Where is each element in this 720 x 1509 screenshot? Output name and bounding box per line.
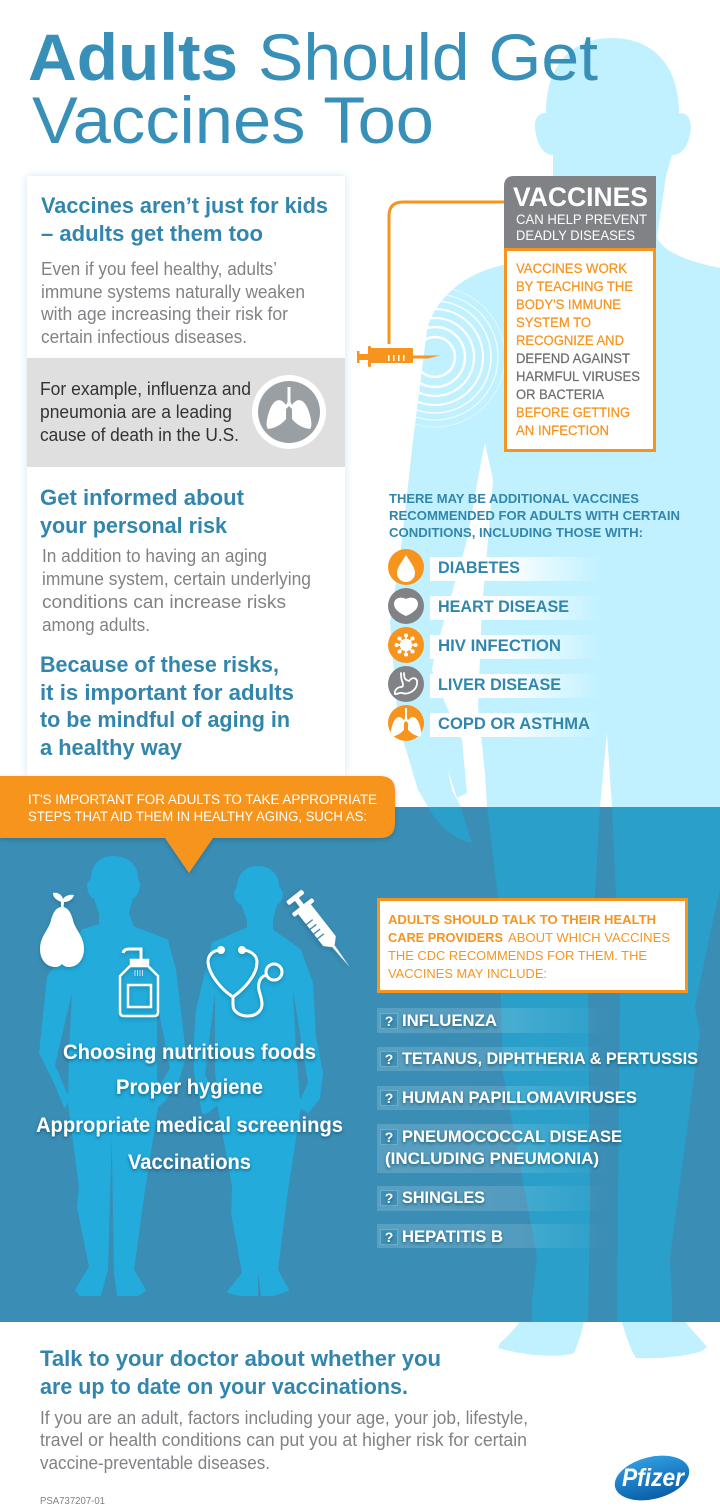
list item: tetanus: ? xyxy=(385,1051,393,1067)
text: healthy aging steps: Proper hygiene xyxy=(116,1076,263,1099)
connector line: syringe to vaccines box xyxy=(389,202,505,344)
grey band: influenza and pneumonia xyxy=(27,358,345,467)
list item: hepatitis b: ? xyxy=(385,1229,393,1245)
icon: stethoscope xyxy=(208,948,282,1016)
body silhouette inside dark section xyxy=(428,807,720,1322)
heading: talk to your doctor: are up to date on your vaccinations. xyxy=(40,1374,408,1399)
panel: how vaccines work: RECOGNIZE AND xyxy=(516,333,624,348)
heading: vaccines not just for kids: Vaccines aren’t just for kids xyxy=(41,193,328,218)
panel: intro card xyxy=(27,176,345,776)
text: underlying conditions: conditions can increase risks xyxy=(42,592,286,612)
panel: talk to providers: VACCINES MAY INCLUDE: xyxy=(388,966,547,981)
heading: because of these risks: it is important for adults xyxy=(40,680,294,705)
list item: hiv infection xyxy=(388,627,600,663)
text: additional vaccines: RECOMMENDED FOR ADULTS WITH CERTAIN xyxy=(389,508,680,523)
text: additional vaccines: THERE MAY BE ADDITIONAL VACCINES xyxy=(389,491,639,506)
panel: dark blue section xyxy=(0,807,720,1322)
figure: right person silhouette xyxy=(195,867,322,1295)
text: underlying conditions: In addition to having an aging xyxy=(42,546,267,566)
title xyxy=(28,20,598,157)
figure: left person silhouette xyxy=(40,857,185,1295)
text: risk factors: If you are an adult, factors including your age, your job, lifestyle, xyxy=(40,1408,528,1428)
heading: vaccines not just for kids xyxy=(41,193,328,246)
text: code: PSA737207-01 xyxy=(40,1496,105,1507)
icon: pear xyxy=(40,893,84,967)
title: Should Get xyxy=(258,20,598,94)
panel: vaccines header: CAN HELP PREVENT xyxy=(516,212,647,227)
panel: vaccines header: DEADLY DISEASES xyxy=(516,228,635,243)
panel: how vaccines work: AN INFECTION xyxy=(516,423,609,438)
panel: how vaccines work: OR BACTERIA xyxy=(516,387,604,402)
callout: orange banner: STEPS THAT AID THEM IN HEALTHY AGING, SUCH AS: xyxy=(28,809,367,824)
list item: pneumococcal disease: (INCLUDING PNEUMONIA) xyxy=(385,1149,599,1168)
list item: copd or asthma xyxy=(388,705,600,741)
list item: pneumococcal disease xyxy=(377,1124,622,1173)
text: risk factors: travel or health conditions can put you at higher risk for certain xyxy=(40,1430,527,1450)
heading: vaccines not just for kids: – adults get them too xyxy=(41,221,263,246)
text: immune systems weaken: immune systems naturally weaken xyxy=(41,282,305,302)
text: risk factors: vaccine-preventable diseases. xyxy=(40,1453,270,1473)
text: healthy aging steps: Vaccinations xyxy=(128,1151,251,1174)
heading: because of these risks: to be mindful of aging in xyxy=(40,707,290,732)
icon: orange syringe xyxy=(357,346,440,367)
list item: shingles: SHINGLES xyxy=(402,1188,485,1207)
heading: because of these risks xyxy=(40,652,294,760)
text: immune systems weaken: certain infectious diseases. xyxy=(41,327,247,347)
list item: hiv infection: HIV INFECTION xyxy=(438,636,561,655)
panel: vaccines header: VACCINES xyxy=(513,182,648,212)
list item: pneumococcal disease: PNEUMOCOCCAL DISEASE xyxy=(402,1127,622,1146)
text: underlying conditions: among adults. xyxy=(42,615,150,635)
list item: diabetes: DIABETES xyxy=(438,558,520,577)
icon: lungs in circle xyxy=(252,375,326,449)
panel: how vaccines work: BY TEACHING THE xyxy=(516,279,633,294)
heading: because of these risks: Because of these risks, xyxy=(40,652,279,677)
logo: pfizer xyxy=(610,1448,694,1508)
panel: talk to providers xyxy=(378,900,686,992)
heading: get informed: your personal risk xyxy=(40,513,228,538)
text: additional vaccines xyxy=(389,491,680,540)
text: additional vaccines: CONDITIONS, INCLUDING THOSE WITH: xyxy=(389,525,643,540)
callout: orange banner: IT'S IMPORTANT FOR ADULTS TO TAKE APPROPRIATE xyxy=(28,792,377,807)
text: healthy aging steps: Appropriate medical screenings xyxy=(36,1114,343,1137)
panel: vaccines header xyxy=(504,176,656,248)
text: healthy aging steps xyxy=(36,1041,343,1174)
list item: pneumococcal disease: ? xyxy=(385,1129,393,1145)
text: healthy aging steps: Choosing nutritious foods xyxy=(63,1041,316,1064)
list item: human papillomaviruses: ? xyxy=(385,1090,393,1106)
heading: talk to your doctor xyxy=(40,1346,441,1399)
list item: diabetes xyxy=(388,549,600,585)
grey band: influenza and pneumonia: pneumonia are a leading xyxy=(40,402,232,422)
panel: how vaccines work: HARMFUL VIRUSES xyxy=(516,369,640,384)
heading: get informed: Get informed about xyxy=(40,485,245,510)
panel: talk to providers: ADULTS SHOULD TALK TO THEIR HEALTH xyxy=(388,912,656,927)
panel: how vaccines work: SYSTEM TO xyxy=(516,315,591,330)
title: Vaccines Too xyxy=(32,83,434,157)
list item: copd or asthma: COPD OR ASTHMA xyxy=(438,714,590,733)
list item: shingles: ? xyxy=(385,1190,393,1206)
list item: liver disease: LIVER DISEASE xyxy=(438,675,561,694)
list item: influenza: INFLUENZA xyxy=(402,1011,497,1030)
arm gaps of the small figures xyxy=(55,990,308,1100)
heading: get informed xyxy=(40,485,245,538)
panel: talk to providers: CARE PROVIDERS xyxy=(388,930,503,945)
list item: influenza xyxy=(377,1008,610,1033)
panel: how vaccines work: DEFEND AGAINST xyxy=(516,351,630,366)
list item: liver disease xyxy=(388,666,600,702)
background: large body silhouette xyxy=(390,38,720,1358)
list item: hepatitis b: HEPATITIS B xyxy=(402,1227,503,1246)
panel: talk to providers: THE CDC RECOMMENDS FOR THEM. THE xyxy=(388,948,647,963)
list item: shingles xyxy=(377,1186,610,1211)
grey band: influenza and pneumonia: cause of death in the U.S. xyxy=(40,425,239,445)
panel: how vaccines work: BEFORE GETTING xyxy=(516,405,630,420)
list item: influenza: ? xyxy=(385,1013,393,1029)
icon: white syringe xyxy=(284,887,360,975)
list item: heart disease: HEART DISEASE xyxy=(438,597,569,616)
text: immune systems weaken: Even if you feel healthy, adults’ xyxy=(41,259,277,279)
list item: tetanus: TETANUS, DIPHTHERIA & PERTUSSIS xyxy=(402,1049,698,1068)
text: immune systems weaken: with age increasing their risk for xyxy=(40,304,288,324)
list item: heart disease xyxy=(388,588,600,624)
panel: talk to providers: ABOUT WHICH VACCINES xyxy=(508,930,670,945)
list item: hepatitis b xyxy=(377,1224,610,1248)
grey band: influenza and pneumonia: For example, influenza and xyxy=(40,379,251,399)
heading: because of these risks: a healthy way xyxy=(40,735,183,760)
logo: pfizer: Pfizer xyxy=(622,1464,685,1492)
panel: how vaccines work: BODY'S IMMUNE xyxy=(516,297,621,312)
heading: talk to your doctor: Talk to your doctor about whether you xyxy=(40,1346,441,1371)
panel: how vaccines work xyxy=(506,250,654,450)
title: Adults xyxy=(28,20,238,94)
panel: how vaccines work: VACCINES WORK xyxy=(516,261,627,276)
text: risk factors xyxy=(40,1408,528,1473)
list item: human papillomaviruses: HUMAN PAPILLOMAVIRUSES xyxy=(402,1088,637,1107)
text: underlying conditions xyxy=(42,546,311,635)
callout: orange banner xyxy=(0,776,395,873)
text: immune systems weaken xyxy=(40,259,305,347)
icon: injection rings on shoulder xyxy=(365,287,505,427)
icon: soap dispenser xyxy=(120,949,158,1016)
text: underlying conditions: immune system, certain underlying xyxy=(42,569,311,589)
